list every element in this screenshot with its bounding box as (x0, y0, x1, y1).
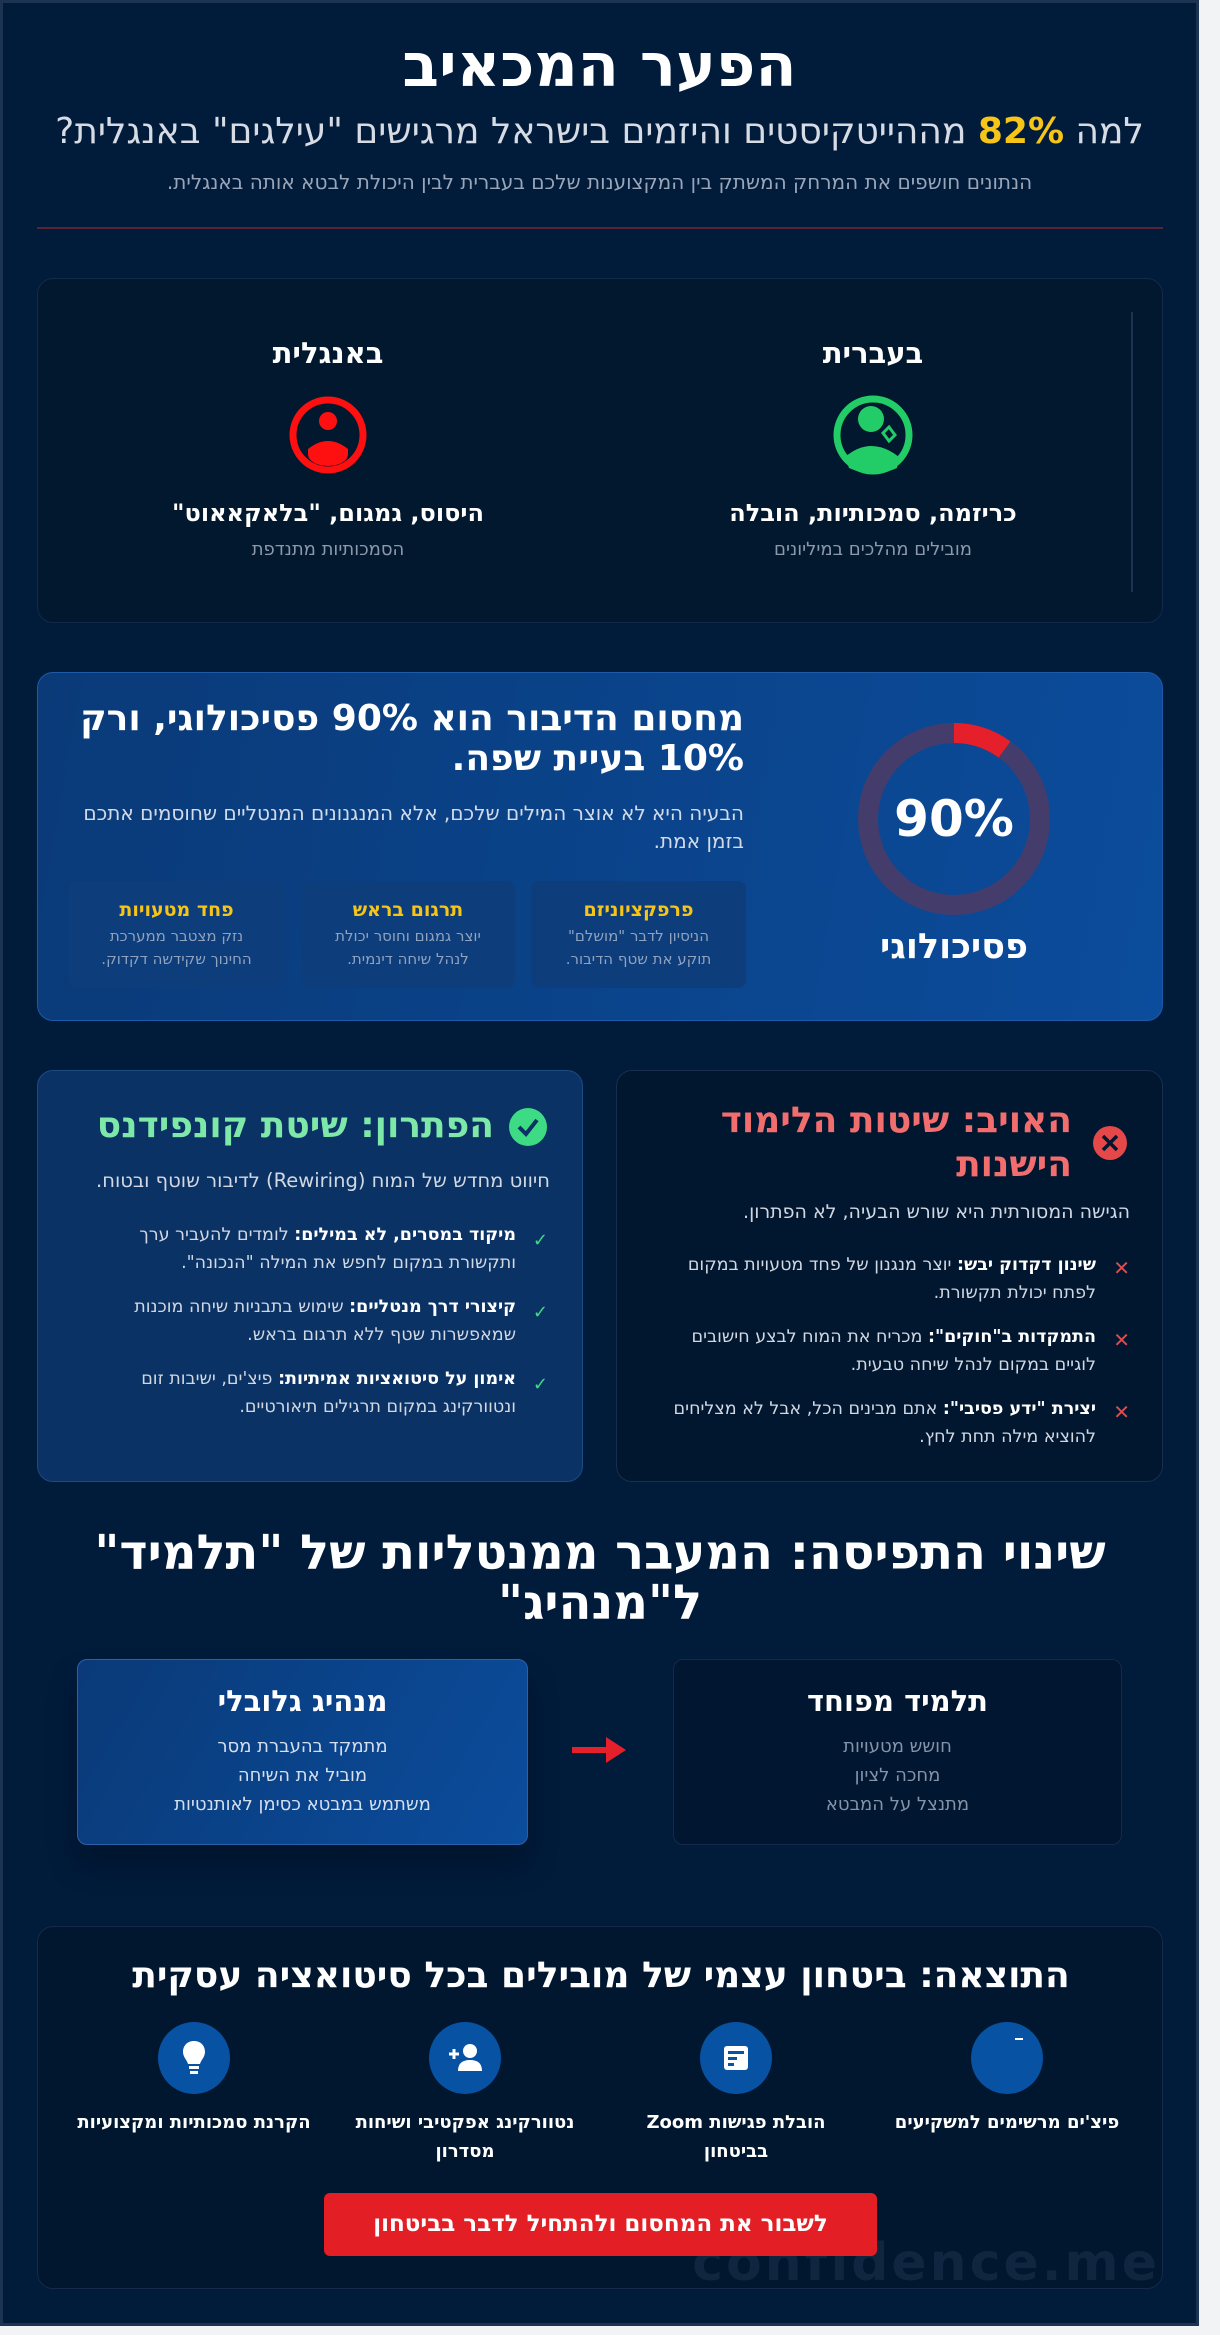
column: hebrew: כריזמה, סמכותיות, הובלה (729, 499, 1017, 527)
column: hebrew: בעברית (823, 336, 923, 370)
box: perfectionism (531, 881, 746, 988)
list: ✓ (533, 1230, 548, 1251)
box: global leader: מוביל את השיחה (238, 1765, 367, 1786)
box: scared student: תלמיד מפוחד (807, 1684, 988, 1718)
list: יצירת "ידע פסיבי": אתם מבינים הכל, אבל לא מצליחים להוציא מילה תחת לחץ. (674, 1399, 1096, 1447)
item: networking: נטוורקינג אפקטיבי ושיחות (356, 2112, 574, 2133)
box: scared student: מתנצל על המבטא (826, 1794, 969, 1815)
text: חיווט מחדש של המוח (Rewiring) לדיבור שוטף ובטוח. (96, 1169, 550, 1192)
intro text: הנתונים חושפים את המרחק המשתק בין המקצוענות שלכם בעברית לבין היכולת לבטא אותה באנגלית. (167, 170, 1032, 194)
donut label: פסיכולוגי (880, 927, 1028, 967)
item: authority (77, 2022, 311, 2133)
item: authority: הקרנת סמכותיות ומקצועיות (77, 2112, 311, 2133)
icon: red speaker (290, 396, 366, 474)
panel: hebrew vs english (37, 278, 1163, 623)
panel: psychological block (37, 672, 1163, 1021)
box: perfectionism: תוקע את שטף הדיבור. (566, 950, 711, 968)
title: הפער המכאיב (402, 31, 797, 101)
column: hebrew: מובילים מהלכים במיליונים (774, 539, 972, 560)
item: networking (356, 2022, 574, 2162)
chart: donut 90% (858, 723, 1050, 915)
chart: donut 90%: 90% (894, 790, 1014, 848)
column: english (172, 336, 484, 560)
box: scared student (673, 1659, 1122, 1845)
box: translation: תרגום בראש (353, 899, 463, 921)
box: scared student: מחכה לציון (855, 1765, 940, 1786)
box: fear of mistakes: פחד מטעויות (119, 899, 234, 921)
list (674, 1255, 1130, 1447)
column: english: היסוס, גמגום, "בלאקאאוט" (172, 499, 484, 527)
heading: מחסום הדיבור הוא 90% פסיכולוגי, ורק 10% בעיית שפה. (80, 698, 744, 779)
column: english: באנגלית (273, 336, 383, 370)
list: מיקוד במסרים, לא במילים: לומדים להעביר ערך ותקשורת במקום לחפש את המילה "הנכונה". (139, 1225, 516, 1273)
icon: green check (509, 1108, 547, 1146)
heading: התוצאה: ביטחון עצמי של מובילים בכל סיטואציה עסקית (132, 1955, 1070, 1996)
box: perfectionism: הניסיון לדבר "מושלם" (568, 927, 709, 945)
box: scared student: חושש מטעויות (843, 1736, 952, 1757)
icon: red x (1093, 1126, 1127, 1160)
item: zoom (646, 2022, 826, 2162)
list: שינון דקדוק יבש: יוצר מנגנון של פחד מטעויות במקום לפתח יכולת תקשורת. (688, 1255, 1096, 1303)
box: fear of mistakes (69, 881, 284, 988)
list: ✕ (1113, 1328, 1130, 1352)
box: global leader: מנהיג גלובלי (218, 1684, 387, 1718)
subtitle: למה 82% מההייטקיסטים והיזמים בישראל מרגישים "עילגים" באנגלית? (55, 111, 1144, 152)
box: global leader: משתמש במבטא כסימן לאותנטיות (174, 1794, 431, 1815)
column: hebrew (729, 336, 1017, 560)
box: perfectionism: פרפקציוניזם (584, 899, 693, 921)
item: zoom: הובלת פגישות Zoom (646, 2112, 826, 2133)
button: CTA: לשבור את המחסום ולהתחיל לדבר בביטחון (373, 2211, 828, 2237)
list (134, 1225, 548, 1417)
text: הגישה המסורתית היא שורש הבעיה, לא הפתרון. (743, 1201, 1130, 1223)
heading: mindset shift: שינוי התפיסה: המעבר ממנטליות של "תלמיד" ל"מנהיג" (94, 1525, 1106, 1631)
list: ✕ (1113, 1256, 1130, 1280)
heading: האויב: שיטות הלימוד הישנות (721, 1100, 1072, 1185)
icon: green speaker (834, 396, 912, 474)
list: התמקדות ב"חוקים": מכריח את המוח לבצע חישובים לוגיים במקום לנהל שיחה טבעית. (692, 1327, 1096, 1375)
box: global leader (77, 1659, 528, 1845)
item: zoom: בביטחון (704, 2141, 768, 2162)
heading: הפתרון: שיטת קונפידנס (97, 1105, 494, 1146)
paragraph: הבעיה היא לא אוצר המילים שלכם, אלא המנגנונים המנטליים שחוסמים אתכם בזמן אמת. (83, 801, 744, 853)
list: אימון על סיטואציות אמיתיות: פיצ'ים, ישיבות זום ונטוורקינג במקום תרגילים תיאורטיים. (141, 1369, 516, 1417)
column: english: הסמכותיות מתנדפת (252, 539, 404, 560)
panel: enemy (616, 1070, 1163, 1482)
box: translation: יוצר גמגום וחוסר יכולת (335, 927, 481, 945)
box: translation (301, 881, 515, 988)
box: global leader: מתמקד בהעברת מסר (217, 1736, 388, 1757)
list: ✕ (1113, 1400, 1130, 1424)
item: pitches: פיצ'ים מרשימים למשקיעים (895, 2112, 1119, 2133)
list: קיצורי דרך מנטליים: שימוש בתבניות שיחה מוכנות שמאפשרות שטף ללא תרגום בראש. (134, 1297, 516, 1345)
panel: solution (37, 1070, 583, 1482)
panel: result (37, 1926, 1163, 2289)
arrow (572, 1737, 626, 1763)
item: networking: מסדרון (435, 2141, 495, 2162)
box: fear of mistakes: החינוך שקידשה דקדוק. (101, 950, 252, 968)
box: fear of mistakes: נזק מצטבר ממערכת (110, 927, 243, 945)
list: ✓ (533, 1374, 548, 1395)
list: ✓ (533, 1302, 548, 1323)
box: translation: לנהל שיחה דינמית. (347, 950, 469, 968)
button: CTA (324, 2193, 877, 2256)
